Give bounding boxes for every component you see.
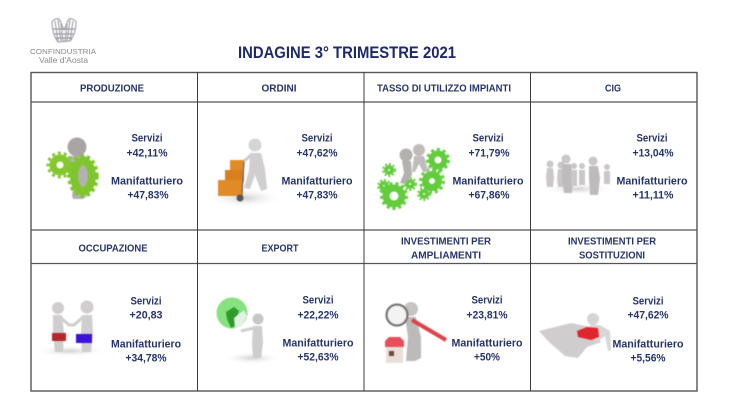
stats: export: [282, 294, 354, 364]
panel: tasso di utilizzo impianti: [377, 82, 524, 208]
icon: two figures shaking hands: [32, 300, 108, 357]
stats: ordini: Manifatturiero: [282, 176, 353, 188]
heading: ordini: ORDINI: [262, 82, 297, 94]
stats: export: Servizi: [302, 294, 334, 306]
stats: investimenti per sostituzioni: Manifatturiero: [612, 338, 684, 350]
stats: export: +52,63%: [298, 352, 339, 364]
panel: occupazione: [32, 242, 181, 364]
logo: Confindustria Valle d'Aosta: Valle d'Aosta: [39, 55, 88, 65]
heading: investimenti per sostituzioni: [568, 236, 656, 262]
stats: ordini: +47,62%: [296, 148, 338, 160]
panel: produzione: [48, 82, 183, 202]
stats: cig: Servizi: [636, 132, 668, 144]
stats: investimenti per ampliamenti: [452, 294, 523, 364]
icon: group of figures: [542, 154, 614, 195]
icon: figure with green gears: [48, 138, 97, 199]
panel: investimenti per sostituzioni: [539, 236, 684, 364]
heading: produzione: PRODUZIONE: [80, 82, 144, 94]
stats: investimenti per ampliamenti: +50%: [474, 352, 500, 364]
stats: investimenti per sostituzioni: Servizi: [632, 296, 664, 308]
stats: tasso di utilizzo impianti: +71,79%: [468, 148, 510, 160]
heading: cig: CIG: [605, 82, 621, 94]
stats: export: Manifatturiero: [282, 338, 354, 350]
stats: cig: +11,11%: [632, 190, 674, 202]
stats: occupazione: Servizi: [130, 296, 162, 308]
stats: investimenti per ampliamenti: +23,81%: [466, 310, 508, 322]
stats: investimenti per ampliamenti: Servizi: [472, 294, 502, 306]
heading: investimenti per ampliamenti: AMPLIAMENTI: [411, 250, 481, 262]
stats: occupazione: +20,83: [130, 310, 162, 322]
heading: investimenti per ampliamenti: [401, 236, 491, 262]
logo: Confindustria Valle d'Aosta: CONFINDUSTRIA: [30, 47, 97, 56]
stats: occupazione: +34,78%: [126, 352, 167, 364]
stats: investimenti per sostituzioni: [612, 296, 684, 364]
table grid: [31, 72, 697, 391]
stats: export: +22,22%: [298, 310, 339, 322]
stats: investimenti per ampliamenti: Manifatturiero: [452, 338, 523, 350]
stats: tasso di utilizzo impianti: [452, 132, 524, 202]
stats: cig: Manifatturiero: [616, 176, 688, 188]
stats: produzione: Servizi: [132, 132, 162, 144]
stats: ordini: [282, 132, 353, 202]
stats: cig: +13,04%: [632, 148, 674, 160]
icon: figure with magnifier and house: [385, 302, 446, 363]
stats: ordini: +47,83%: [296, 190, 338, 202]
icon: figure with hand truck and boxes: [207, 138, 283, 208]
heading: export: EXPORT: [262, 242, 299, 254]
icon: logo eagle: [52, 19, 76, 42]
panel: export: [216, 242, 354, 364]
logo: Confindustria Valle d'Aosta: [30, 19, 97, 65]
icon: figures on green gears: [378, 144, 448, 208]
stats: cig: [616, 132, 688, 202]
stats: occupazione: [111, 296, 181, 364]
heading: investimenti per sostituzioni: SOSTITUZIONI: [579, 250, 645, 262]
heading: tasso di utilizzo impianti: TASSO DI UTILIZZO IMPIANTI: [377, 82, 511, 94]
stats: tasso di utilizzo impianti: Manifatturiero: [452, 176, 524, 188]
icon: figure placing red puzzle piece: [539, 313, 611, 358]
panel: cig: [542, 82, 688, 202]
stats: tasso di utilizzo impianti: +67,86%: [468, 190, 510, 202]
heading: occupazione: OCCUPAZIONE: [78, 242, 148, 254]
stats: produzione: +42,11%: [126, 148, 168, 160]
stats: produzione: [111, 132, 183, 202]
title: INDAGINE 3° TRIMESTRE 2021: [238, 43, 456, 62]
stats: investimenti per sostituzioni: +47,62%: [628, 310, 669, 322]
stats: produzione: Manifatturiero: [111, 176, 183, 188]
stats: ordini: Servizi: [302, 132, 332, 144]
heading: investimenti per sostituzioni: INVESTIMENTI PER: [568, 236, 656, 248]
panel: ordini: [207, 82, 353, 208]
stats: produzione: +47,83%: [128, 190, 169, 202]
panel: investimenti per ampliamenti: [385, 236, 523, 364]
heading: investimenti per ampliamenti: INVESTIMENTI PER: [401, 236, 491, 248]
stats: investimenti per sostituzioni: +5,56%: [630, 352, 666, 364]
icon: figure holding green globe: [216, 298, 282, 364]
stats: occupazione: Manifatturiero: [111, 338, 181, 350]
stats: tasso di utilizzo impianti: Servizi: [472, 132, 504, 144]
